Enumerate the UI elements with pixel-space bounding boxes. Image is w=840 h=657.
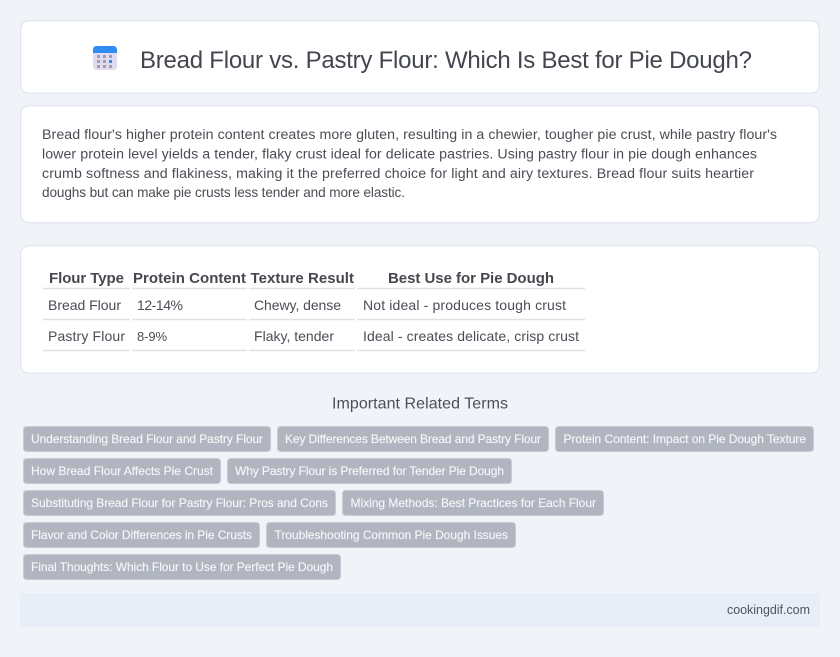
chip bbox=[24, 522, 260, 548]
table row: bread flour: Chewy, dense bbox=[254, 297, 341, 313]
table row: pastry flour: Pastry Flour bbox=[48, 328, 125, 344]
header panel bbox=[21, 21, 819, 93]
title: Bread Flour vs. Pastry Flour: Which Is Best for Pie Dough? bbox=[140, 47, 752, 74]
chip: Mixing Methods: Best Practices for Each Flour bbox=[350, 496, 596, 510]
chip bbox=[24, 426, 270, 452]
icon: calendar bbox=[93, 46, 117, 70]
panel: intro paragraph: lower protein level yields a tender, flaky crust ideal for delicate pastries. Using pastry flour in pie dough enhances bbox=[42, 146, 757, 162]
table row: pastry flour: 8-9% bbox=[137, 329, 167, 344]
chip: Substituting Bread Flour for Pastry Flour: Pros and Cons bbox=[31, 496, 328, 510]
table row: pastry flour: Flaky, tender bbox=[254, 328, 334, 344]
panel: intro paragraph: doughs but can make pie crusts less tender and more elastic. bbox=[42, 185, 405, 200]
chip bbox=[24, 554, 340, 580]
footer: cookingdif.com bbox=[727, 603, 810, 617]
chip: Troubleshooting Common Pie Dough Issues bbox=[274, 528, 508, 542]
chip bbox=[342, 490, 604, 516]
table header row: Protein Content bbox=[133, 270, 246, 287]
table row: pastry flour bbox=[43, 328, 585, 350]
table row: bread flour: 12-14% bbox=[137, 297, 183, 313]
table header row: Flour Type bbox=[49, 270, 124, 287]
panel: related term chips bbox=[24, 426, 814, 580]
chip: Protein Content: Impact on Pie Dough Texture bbox=[564, 432, 806, 446]
panel: intro paragraph bbox=[21, 106, 819, 223]
panel: intro paragraph: crumb softness and flakiness, making it the preferred choice for light and airy textures. Bread flour suits heartier bbox=[42, 166, 754, 182]
table row: pastry flour: Ideal - creates delicate, crisp crust bbox=[363, 328, 579, 344]
chip: Understanding Bread Flour and Pastry Flour bbox=[31, 432, 263, 446]
table header row: Texture Result bbox=[250, 270, 354, 287]
panel: intro paragraph: Bread flour's higher protein content creates more gluten, resulting in a chewier, tougher pie crust, while pastry flour's bbox=[42, 127, 777, 143]
chip: Final Thoughts: Which Flour to Use for Perfect Pie Dough bbox=[31, 560, 333, 574]
chip bbox=[24, 490, 336, 516]
table header row: Best Use for Pie Dough bbox=[388, 270, 554, 287]
footer bbox=[20, 593, 820, 627]
chip bbox=[278, 426, 548, 452]
chip: Key Differences Between Bread and Pastry Flour bbox=[285, 432, 541, 446]
chip bbox=[24, 458, 220, 484]
panel: comparison table bbox=[21, 246, 819, 373]
chip bbox=[228, 458, 512, 484]
chip: Why Pastry Flour is Preferred for Tender Pie Dough bbox=[235, 464, 504, 478]
table row: bread flour: Bread Flour bbox=[48, 297, 121, 313]
table row: bread flour bbox=[43, 297, 585, 320]
chip bbox=[266, 522, 516, 548]
chip: How Bread Flour Affects Pie Crust bbox=[31, 464, 214, 478]
table row: bread flour: Not ideal - produces tough crust bbox=[363, 297, 566, 313]
chip bbox=[556, 426, 814, 452]
heading: related terms: Important Related Terms bbox=[332, 396, 508, 412]
chip: Flavor and Color Differences in Pie Crusts bbox=[31, 528, 252, 542]
table header row bbox=[43, 270, 585, 288]
